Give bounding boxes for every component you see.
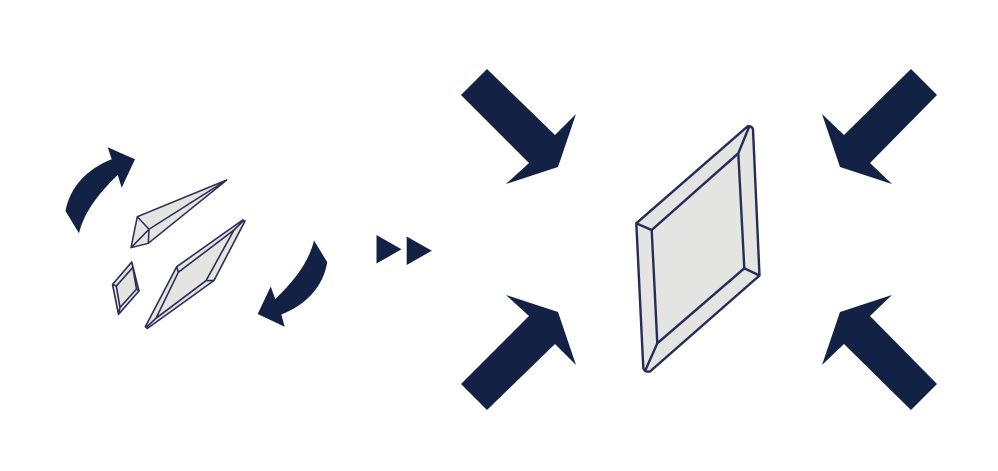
shard: long narrow piece [131, 180, 227, 248]
shard: large flat piece [145, 220, 245, 328]
double play arrows [376, 235, 432, 265]
compressed solid plate [636, 126, 760, 372]
curved arrow: lower right [258, 240, 327, 327]
compression arrow: bottom right [822, 295, 937, 410]
compression arrow: top right [822, 69, 937, 184]
compression arrow: top left [461, 69, 576, 184]
compression arrow: bottom left [461, 295, 576, 410]
curved arrow: upper left [66, 147, 135, 233]
shard: small diamond piece [112, 262, 139, 314]
